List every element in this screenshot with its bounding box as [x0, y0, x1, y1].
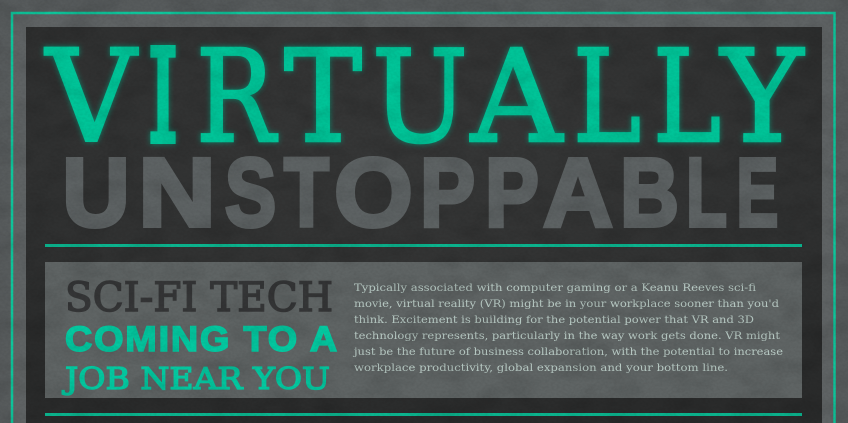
- intro paragraph: [353, 282, 783, 374]
- title: Virtually: V: [44, 23, 138, 171]
- intro paragraph: just be the future of business collaboration, with the potential to increase: [353, 346, 783, 358]
- title: Unstoppable: O: [334, 138, 413, 247]
- title: Virtually: L: [653, 23, 721, 171]
- intro paragraph: technology represents, particularly in the way work gets done. VR might: [354, 330, 781, 342]
- title: Unstoppable: S: [225, 138, 276, 247]
- intro paragraph: workplace productivity, global expansion and your bottom line.: [354, 362, 728, 374]
- title: Unstoppable: A: [543, 138, 613, 247]
- intro paragraph: think. Excitement is building for the potential power that VR and 3D: [354, 314, 754, 326]
- heading: Job near you: JOB NEAR YOU: [62, 362, 330, 397]
- title: Unstoppable: P: [420, 138, 475, 247]
- title: Virtually: A: [470, 23, 563, 171]
- heading: Sci-Fi Tech: SCI-FI TECH: [65, 275, 333, 321]
- title: Virtually: R: [196, 23, 278, 171]
- title: Unstoppable: U: [62, 138, 130, 247]
- title: Unstoppable: B: [620, 138, 679, 247]
- title: Unstoppable: P: [485, 138, 539, 247]
- intro paragraph: Typically associated with computer gaming or a Keanu Reeves sci-fi: [354, 282, 756, 294]
- intro panel background: [45, 262, 802, 398]
- title: Unstoppable: E: [736, 138, 778, 247]
- intro paragraph: movie, virtual reality (VR) might be in your workplace sooner than you'd: [354, 298, 779, 310]
- panel: introduction: [45, 262, 802, 398]
- title: Unstoppable: T: [284, 138, 329, 247]
- heading: Coming to a: COMING TO A: [65, 319, 337, 359]
- title: Virtually: L: [573, 23, 641, 171]
- title: Virtually: I: [148, 23, 178, 171]
- title: Virtually: Y: [719, 23, 804, 171]
- title: Unstoppable: N: [138, 138, 216, 247]
- title: Virtually: U: [372, 23, 468, 171]
- title: Unstoppable: L: [686, 138, 727, 247]
- title: Virtually: T: [284, 23, 362, 171]
